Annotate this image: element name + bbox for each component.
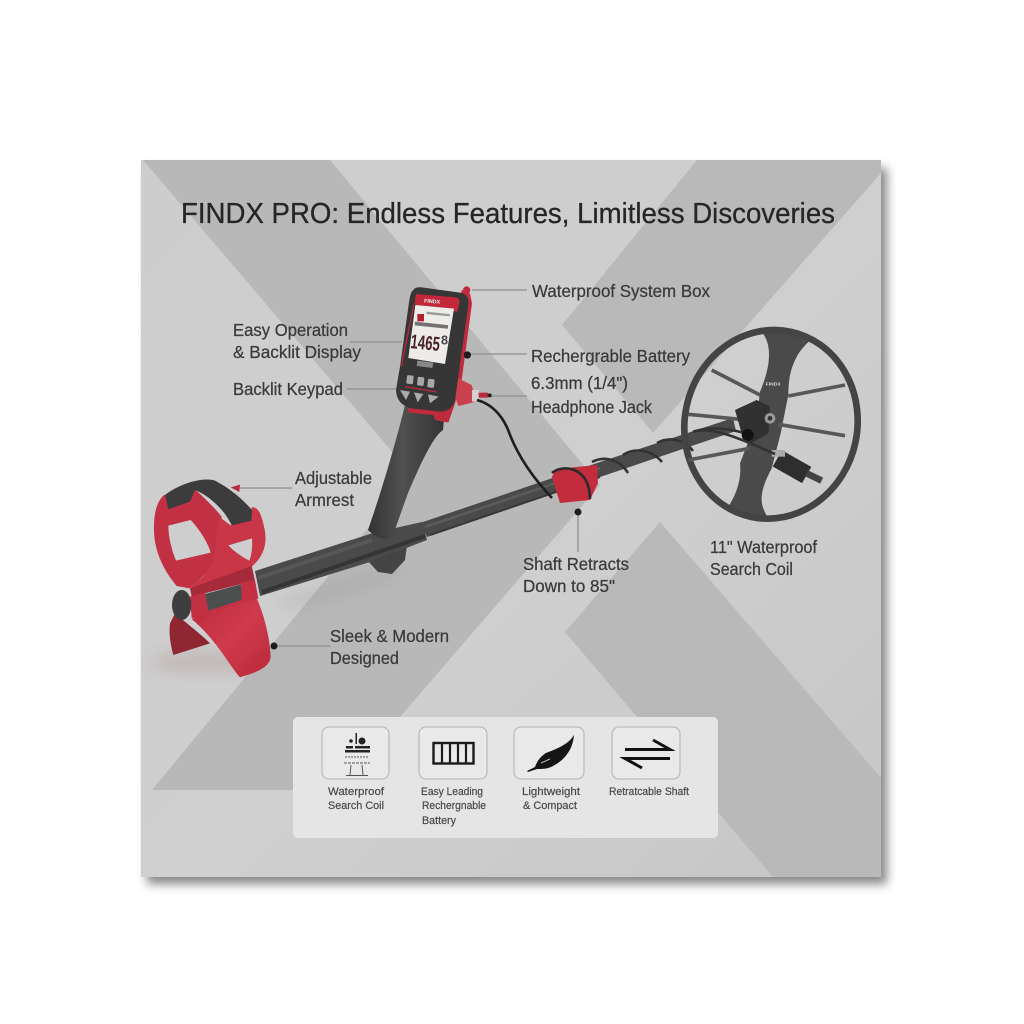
label: search coil: 11" Waterproof	[710, 537, 817, 557]
screen: 8	[441, 334, 448, 348]
control box	[396, 286, 492, 423]
leader lines	[240, 290, 578, 646]
armrest	[154, 480, 271, 677]
screen	[408, 305, 454, 364]
headphone jack	[455, 378, 492, 406]
label: headphone jack: Headphone Jack	[531, 397, 652, 417]
label: search coil: Search Coil	[710, 559, 793, 579]
label: adjustable armrest: Armrest	[295, 490, 354, 510]
keypad	[400, 375, 439, 403]
panel: feature icons card	[293, 717, 718, 838]
label: shaft retracts: Down to 85"	[523, 576, 615, 596]
brand text: FINDX	[424, 298, 441, 306]
feature: rechargeable battery: Rechergnable	[422, 800, 486, 812]
feature: waterproof search coil: Waterproof	[328, 786, 385, 798]
coil cable	[693, 430, 775, 454]
feature: lightweight and compact	[514, 727, 584, 812]
search coil	[680, 326, 862, 522]
feature: rechargeable battery: Easy Leading	[421, 786, 483, 798]
label: shaft retracts: Shaft Retracts	[523, 554, 629, 574]
label: adjustable armrest: Adjustable	[295, 468, 372, 488]
red side housing	[408, 290, 472, 423]
front foot	[192, 598, 271, 677]
title: FINDX PRO: Endless Features, Limitless Discoveries	[181, 198, 835, 230]
coil spine	[730, 333, 809, 516]
feature: retractable shaft: Retratcable Shaft	[609, 786, 689, 798]
label: headphone jack: 6.3mm (1/4")	[531, 373, 628, 393]
label: sleek and modern: Designed	[330, 648, 399, 668]
feature: rechargeable battery: Battery	[422, 815, 457, 827]
dark body	[396, 287, 468, 412]
feature: waterproof search coil	[322, 727, 389, 812]
handle	[368, 405, 445, 539]
headphone cable	[477, 400, 552, 498]
feature: waterproof search coil: Search Coil	[328, 800, 384, 812]
screen: 1465	[409, 331, 441, 356]
hinge recess	[190, 566, 255, 597]
detector shaft	[255, 418, 736, 596]
rear foot	[170, 613, 210, 655]
panel: background with shadow	[141, 160, 887, 884]
hinge cylinder	[205, 584, 242, 611]
model plate	[417, 361, 433, 368]
top red bump	[463, 286, 470, 294]
coil rim	[667, 314, 875, 535]
label: rechargeable battery: Rechergrable Battery	[531, 346, 690, 366]
feature: retractable shaft	[609, 727, 689, 798]
rear tube	[772, 450, 822, 481]
strap	[165, 480, 252, 525]
end cap	[172, 590, 191, 620]
red faceplate	[414, 294, 459, 312]
label: easy operation: Easy Operation	[233, 320, 348, 340]
sleek design pointer	[270, 642, 278, 650]
feature: lightweight and compact: & Compact	[523, 800, 577, 812]
label: sleek and modern: Sleek & Modern	[330, 626, 449, 646]
front cuff	[190, 507, 266, 593]
label: easy operation: & Backlit Display	[233, 342, 361, 362]
coil spokes	[688, 370, 845, 460]
spiral cable	[592, 429, 775, 473]
shaft clamp	[552, 465, 598, 516]
rear cuff	[154, 489, 222, 588]
strap tip	[231, 485, 240, 492]
feature: rechargeable battery	[419, 727, 487, 827]
coil logo: FINDX	[766, 382, 781, 388]
battery knob	[464, 351, 471, 359]
label: backlit keypad: Backlit Keypad	[233, 379, 343, 399]
hinge block	[190, 580, 258, 618]
label: waterproof system box: Waterproof System Box	[532, 281, 710, 301]
feature: lightweight and compact: Lightweight	[522, 786, 580, 798]
hub	[735, 400, 770, 444]
